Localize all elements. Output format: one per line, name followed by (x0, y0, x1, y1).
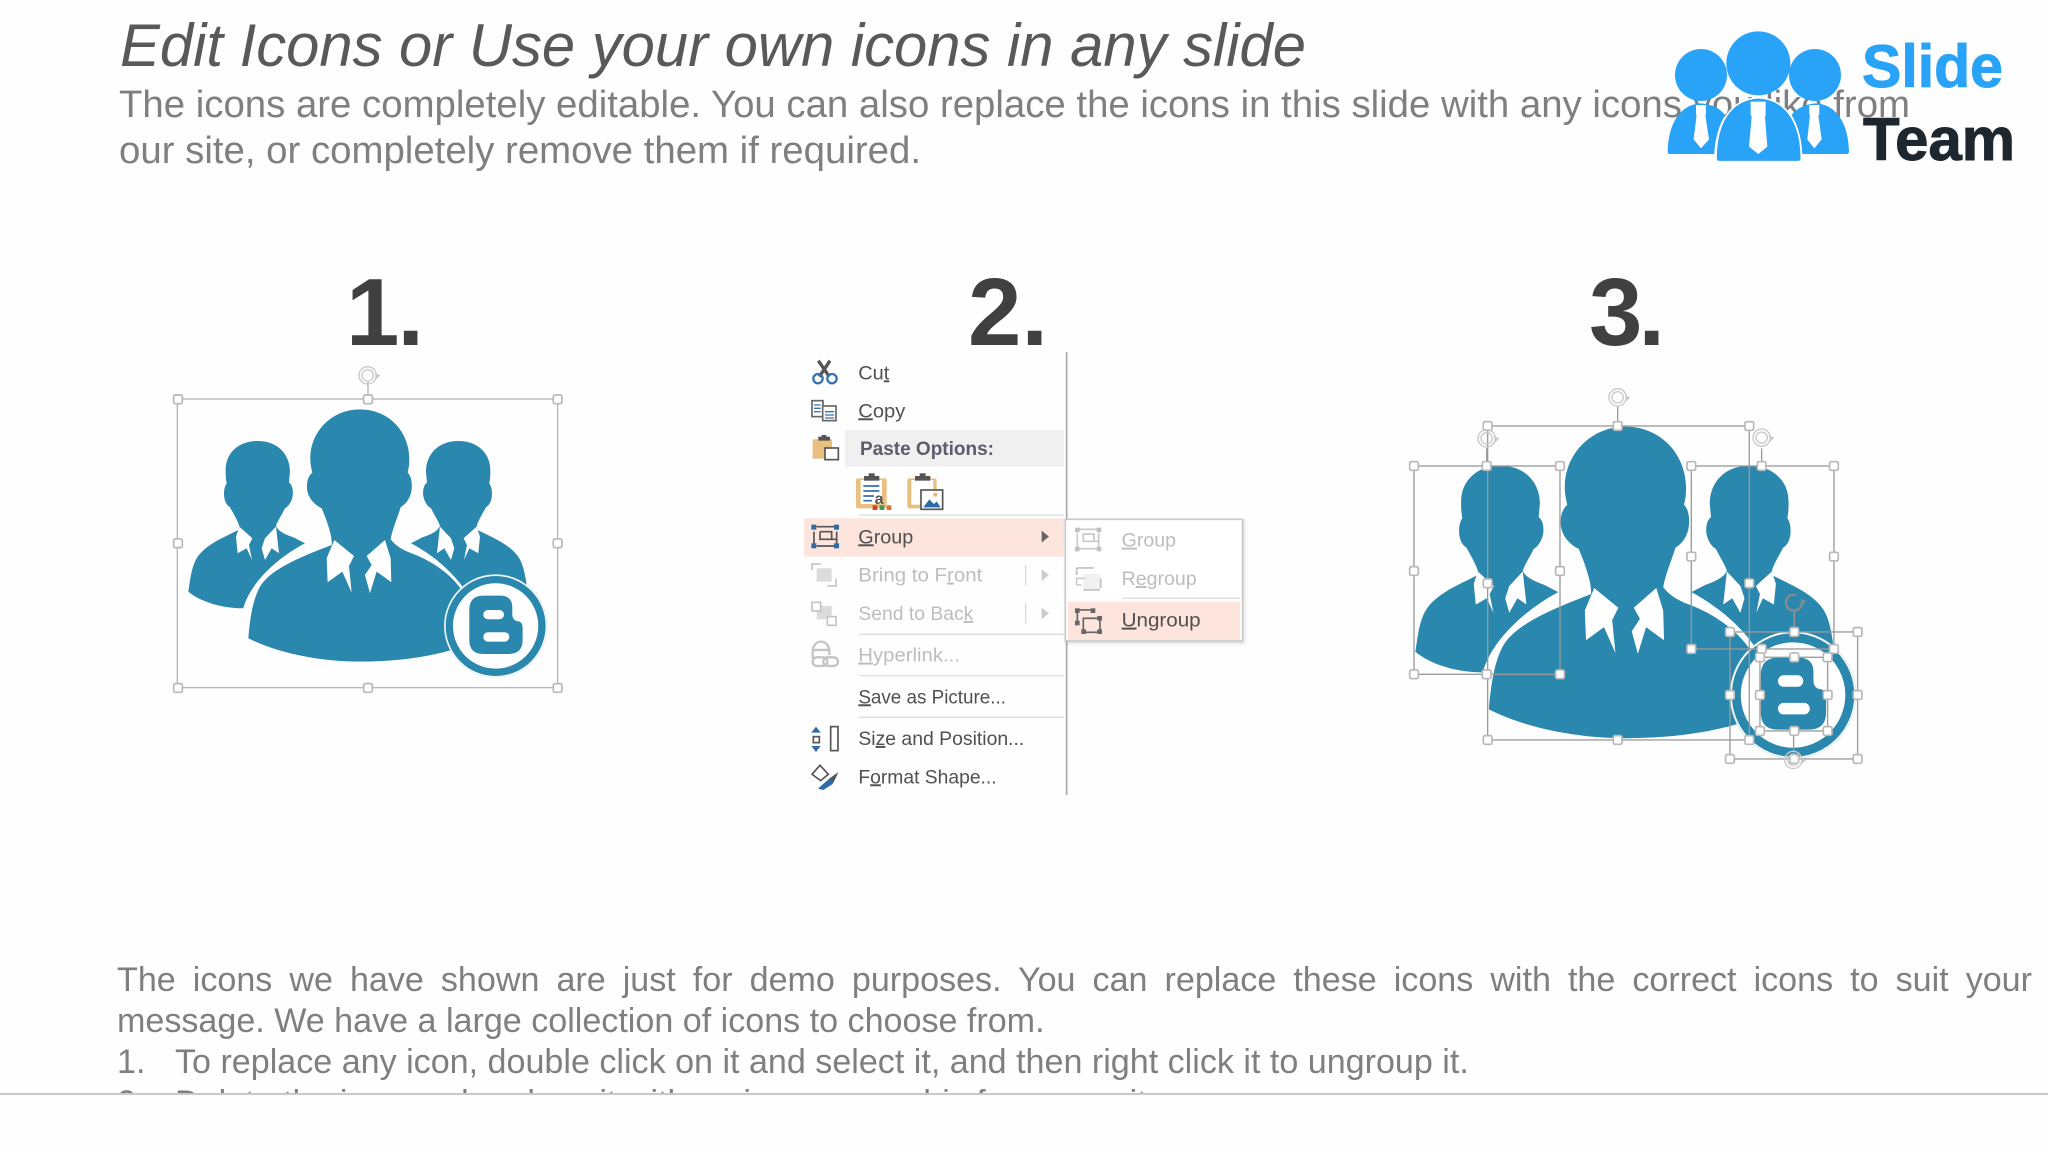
menu labels: Save as Picture... (858, 686, 1006, 708)
menu labels (858, 362, 1024, 788)
selection box (177, 382, 558, 688)
icon: paste keep text (856, 473, 891, 510)
body text block: To replace any icon, double click on it and select it, and then right click it to ungroup it. (175, 1043, 1469, 1081)
panel 2: context menu (804, 352, 1243, 795)
menu labels: Hyperlink... (858, 645, 960, 667)
paste options highlight (845, 430, 1064, 467)
slide bottom edge (0, 1094, 2048, 1152)
submenu icon: ungroup (1075, 608, 1102, 634)
menu labels: Bring to Front (858, 565, 983, 587)
menu labels: Size and Position... (858, 728, 1024, 750)
icon: hyperlink (813, 642, 838, 666)
icon: paste keep text: a (875, 491, 884, 508)
menu labels: Send to Back (858, 603, 974, 625)
logo: SlideTeam (1668, 31, 2015, 173)
menu labels: Paste Options: (860, 438, 994, 460)
icon: size and position (811, 727, 838, 752)
icon: format shape (812, 765, 838, 790)
subtitle: The icons are completely editable. You can also replace the icons in this slide with any icons you like from (119, 84, 1910, 126)
submenu labels (1122, 530, 1201, 632)
submenu labels: Ungroup (1122, 610, 1201, 632)
subtitle (119, 84, 1910, 172)
submenu arrows (1042, 531, 1049, 619)
body text block: The icons we have shown are just for demo purposes. You can replace these icons with the correct icons to suit your (117, 961, 2032, 999)
body text block: 1. (117, 1043, 145, 1081)
icon: paste (813, 435, 838, 460)
submenu (1065, 519, 1243, 641)
menu labels: Format Shape... (858, 766, 997, 788)
icon: team ungrouped (1415, 427, 1856, 758)
ungroup highlight (1068, 602, 1240, 640)
icon: send to back (812, 602, 836, 625)
selection handles (174, 367, 562, 692)
icon: cut (813, 361, 837, 383)
logo icon: three people (1668, 31, 1849, 162)
menu labels: Group (858, 526, 913, 548)
group row highlight (804, 518, 1064, 557)
step number 2: 2. (968, 259, 1048, 366)
icon: paste as picture (907, 473, 943, 509)
icon: copy (812, 401, 836, 421)
submenu icon: group (1075, 528, 1101, 551)
icon: bring to front (812, 564, 836, 586)
submenu labels: Regroup (1122, 568, 1197, 590)
submenu icon: regroup (1077, 568, 1101, 590)
step number 1: 1. (346, 259, 424, 366)
body text block (117, 961, 2032, 1094)
logo: SlideTeam: Team (1863, 106, 2015, 173)
menu separators (859, 515, 1064, 717)
selection boxes and handles (1410, 389, 1862, 769)
menu labels: Copy (858, 400, 906, 422)
submenu labels: Group (1122, 530, 1176, 552)
logo text: Slide (1862, 33, 2003, 100)
icon: group (811, 525, 839, 548)
title: Edit Icons or Use your own icons in any slide (120, 12, 1306, 79)
step number 3: 3. (1589, 259, 1665, 366)
subtitle: our site, or completely remove them if required. (119, 130, 921, 172)
panel 1: grouped icon selected (174, 367, 562, 692)
icon: team with blogger badge (188, 409, 547, 677)
menu edge (1064, 352, 1069, 795)
menu labels: Cut (858, 362, 890, 384)
body text block: message. We have a large collection of icons to choose from. (117, 1002, 1045, 1040)
panel 3: ungrouped icon with individual selections (1410, 389, 1862, 769)
